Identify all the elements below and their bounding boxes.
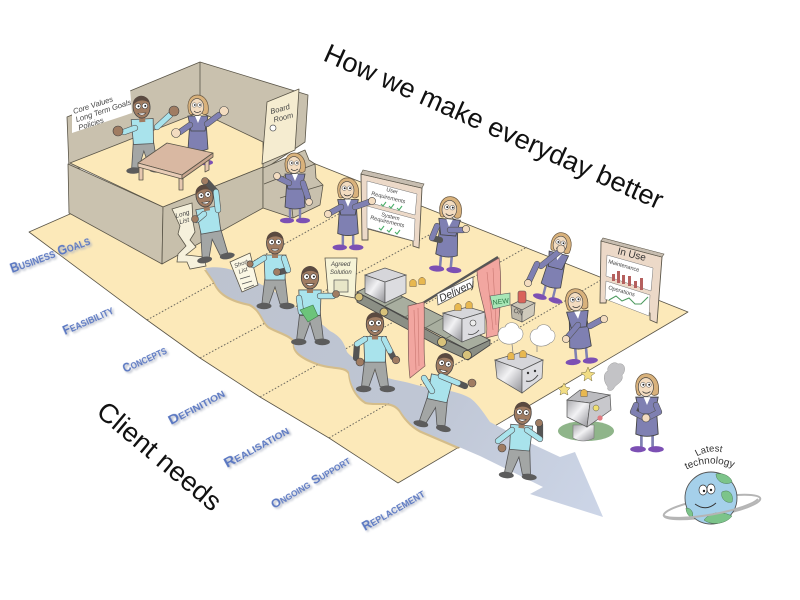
man with long list [184, 178, 235, 264]
seated woman [172, 95, 228, 165]
client needs label: Client needs [91, 396, 228, 517]
goals text: Core Values [72, 94, 114, 116]
delivery sign [437, 277, 477, 305]
on box with red button: ON [512, 307, 524, 318]
maintenance panel [606, 255, 653, 291]
client journey band and arrow [204, 267, 603, 519]
stage label: realisation: Realisation [221, 423, 291, 471]
broken cube [558, 389, 614, 441]
man at replacement [498, 401, 543, 481]
goals text: Policies [77, 116, 105, 132]
long list text: List [178, 216, 191, 226]
delivery cube with face [443, 301, 485, 342]
requirements board: User [386, 187, 399, 196]
requirements board [361, 170, 424, 248]
in use board [600, 238, 664, 323]
user requirements panel [367, 181, 417, 215]
back walls [67, 62, 308, 170]
system requirements panel [367, 206, 415, 241]
woman at requirements board [324, 178, 376, 250]
man with agreed solution [291, 266, 340, 345]
stage label: concepts: Concepts [120, 343, 169, 376]
in use heading: In Use [616, 246, 647, 264]
long list text: Long [175, 209, 190, 220]
latest technology label: Latest [694, 446, 723, 456]
board room table [138, 143, 213, 190]
stage label: definition: Definition [165, 385, 227, 428]
woman waving [524, 229, 578, 305]
new text: NEW [492, 298, 510, 307]
stage label: replacement: Replacement [360, 486, 428, 534]
silver cube on conveyor [365, 268, 406, 303]
conveyor rollers [355, 293, 472, 360]
new flag [490, 293, 510, 309]
seated man [113, 95, 179, 174]
maintenance bar chart [612, 271, 643, 290]
operations panel [605, 281, 650, 316]
short list paper [230, 253, 258, 292]
stage label: feasibility: Feasibility [61, 303, 116, 338]
sparks [558, 367, 595, 395]
planet latest technology: technology [684, 456, 735, 470]
front left wall [68, 164, 163, 264]
steam puffs [498, 323, 555, 353]
title: How we make everyday better [320, 38, 668, 215]
floor plane [29, 163, 688, 483]
short list text: List [238, 267, 249, 276]
long list paper [172, 203, 206, 269]
operations line chart [609, 296, 648, 304]
requirements board: Requirements [370, 215, 405, 229]
conveyor belt [355, 283, 490, 360]
goals text: Long Term Goals [74, 98, 133, 124]
requirements board: System [381, 212, 400, 223]
board room [67, 62, 308, 264]
short list text: Short [234, 259, 249, 270]
stage label: business goals: Business Goals [8, 232, 92, 276]
agreed solution text: Agreed [331, 262, 350, 268]
steps [263, 150, 323, 218]
steaming cube [495, 350, 543, 393]
woman near top edge [429, 195, 470, 274]
yellow bells [410, 277, 425, 286]
in use board: Operations [607, 285, 636, 299]
stage label: ongoing support: Ongoing Support [268, 453, 353, 512]
door text: Room [272, 110, 294, 124]
infographic scene [9, 44, 762, 532]
agreed solution text: Solution [330, 270, 352, 276]
man at realisation [413, 350, 476, 433]
agreed solution paper [325, 258, 357, 298]
man with short list [247, 232, 294, 309]
door text: Board [269, 102, 291, 116]
delivery curtain [408, 257, 501, 378]
requirements board: Requirements [371, 191, 406, 205]
grey smoke [604, 363, 625, 391]
on box with red button [511, 291, 535, 322]
stage divider lines [147, 190, 601, 438]
delivery text: Delivery [437, 277, 477, 305]
green folder [300, 305, 318, 322]
solution cube icon [334, 280, 348, 292]
in use board: Maintenance [607, 259, 640, 274]
goals whiteboard [72, 88, 132, 133]
planet latest technology [662, 446, 762, 524]
man at middle of journey [356, 313, 400, 392]
room floor [70, 112, 263, 207]
woman at in use board [559, 287, 608, 366]
woman with hands crossed [630, 374, 664, 452]
woman on steps [274, 153, 312, 223]
door [262, 89, 299, 164]
front right wall [162, 167, 263, 264]
door handle [270, 125, 276, 131]
